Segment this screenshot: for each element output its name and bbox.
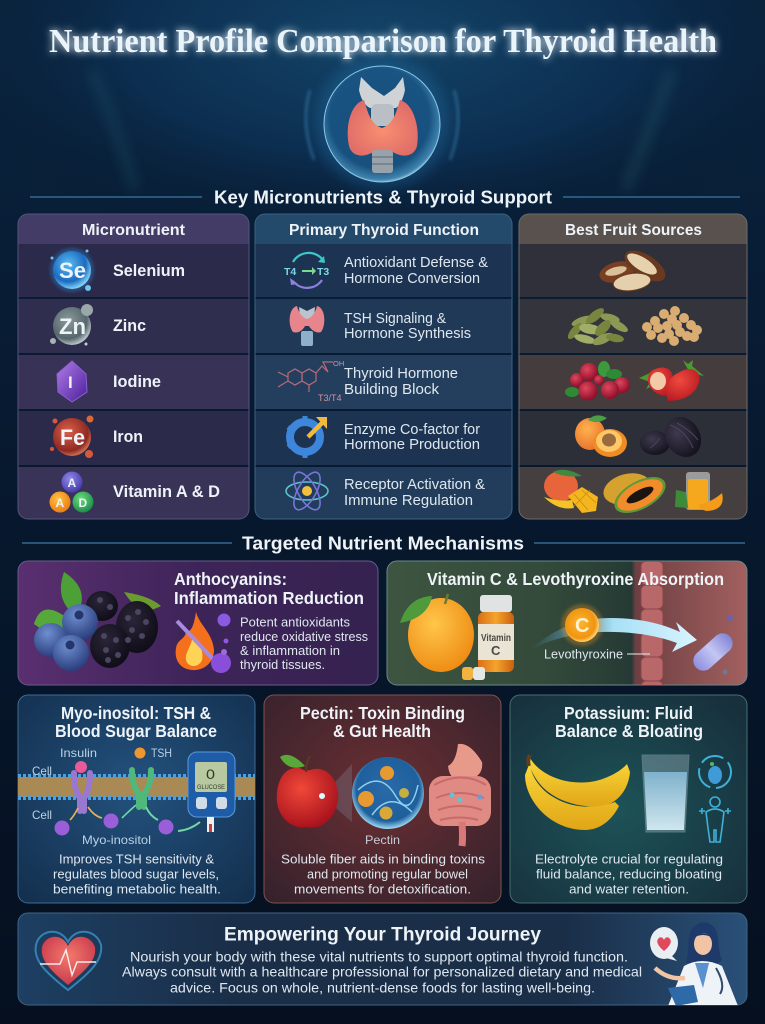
row: antioxidant defense: T3 [317, 266, 329, 278]
row: vitamin A and D [50, 472, 220, 512]
row: antioxidant defense: Antioxidant Defense & [344, 255, 488, 271]
text: anthocyanins description: thyroid tissues. [240, 658, 325, 672]
illustration: cell membrane [18, 776, 255, 798]
food: orange juice [675, 472, 723, 511]
label: levothyroxine: Levothyroxine [544, 648, 623, 662]
illustration: myo-inositol molecules and arrows: Myo-inositol [82, 833, 151, 847]
illustration: vitamin C bottle: C [491, 643, 501, 658]
heading [300, 703, 465, 741]
row: iodine: I [68, 373, 73, 392]
row: selenium [50, 248, 185, 292]
label: pectin: Pectin [365, 833, 400, 847]
panel: best fruit sources column [519, 214, 747, 521]
row: receptor atom: Immune Regulation [344, 493, 473, 509]
row: zinc: Zn [59, 314, 86, 339]
text: pectin description [281, 852, 486, 896]
panel: potassium [510, 695, 747, 903]
heading: Empowering Your Thyroid Journey [224, 924, 541, 946]
row: enzyme gear [288, 416, 480, 458]
heading: targeted nutrient mechanisms: Targeted Nutrient Mechanisms [242, 534, 524, 554]
labels: cell: Cell [32, 764, 52, 778]
icon: vitamin C coin [561, 604, 603, 646]
text: myo-inositol description [53, 852, 221, 896]
heading: & Gut Health [333, 721, 431, 741]
row: antioxidant defense: Hormone Conversion [344, 271, 480, 287]
heading: anthocyanins [174, 569, 364, 608]
text: anthocyanins description [240, 616, 368, 672]
illustration: glucose meter [188, 752, 235, 832]
food: pumpkin seeds [566, 305, 630, 348]
row: hormone molecule [278, 359, 458, 403]
food: prunes [640, 410, 708, 464]
text: myo-inositol description: Improves TSH sensitivity & [59, 852, 214, 866]
food: apricots [575, 415, 627, 457]
text: anthocyanins description: & inflammation in [240, 644, 340, 658]
row: hormone molecule: Building Block [344, 382, 440, 398]
panel: vitamin C and levothyroxine [386, 560, 748, 686]
illustration: TSH receptor [132, 746, 172, 807]
illustration: orange [400, 594, 474, 672]
illustration: TSH receptor: TSH [151, 746, 172, 760]
panel: micronutrient column [18, 214, 249, 519]
row: antioxidant defense: T4 [284, 266, 296, 278]
food: cranberries [565, 361, 630, 400]
row: receptor atom: Receptor Activation & [344, 477, 485, 493]
arrow: absorption swoosh [530, 618, 697, 652]
heading: Blood Sugar Balance [55, 721, 217, 741]
heading: Potassium: Fluid [564, 703, 693, 723]
illustration: bananas [525, 755, 630, 830]
row: hormone molecule: OH [333, 359, 344, 368]
panel: myo-inositol [18, 695, 255, 903]
row: selenium: Selenium [113, 262, 185, 280]
row: enzyme gear: Hormone Production [344, 437, 480, 453]
text: myo-inositol description: regulates blood sugar levels, [53, 866, 219, 882]
icon: flame and wand [176, 612, 231, 673]
column header: Primary Thyroid Function [289, 222, 479, 239]
text: pectin description: movements for detoxification. [294, 882, 471, 896]
illustration: apple [277, 755, 352, 828]
text: anthocyanins description: Potent antioxidants [240, 616, 350, 630]
illustration: intestinal wall cells [641, 561, 663, 705]
illustration: digestive tract [429, 744, 491, 846]
column header: Micronutrient [82, 222, 186, 239]
illustration: myo-inositol molecules and arrows [54, 805, 200, 847]
row: zinc: Zinc [113, 317, 146, 335]
heading [555, 703, 703, 741]
row: antioxidant defense [284, 253, 488, 288]
icon: heart with pulse [36, 932, 101, 990]
heading: Myo-inositol: TSH & [61, 703, 211, 723]
icon: person [699, 797, 731, 842]
illustration: glucose meter: GLUCOSE [197, 785, 225, 791]
row: TSH signaling [290, 306, 471, 346]
row: iodine [57, 361, 161, 402]
row: enzyme gear: Enzyme Co-factor for [344, 422, 480, 438]
text: pectin description: and promoting regular bowel [307, 866, 468, 882]
text: myo-inositol description: benefiting metabolic health. [53, 882, 221, 896]
row: iron [50, 416, 143, 458]
heading: Balance & Bloating [555, 721, 703, 741]
row: hormone molecule: T3/T4 [318, 393, 342, 403]
text: anthocyanins description: reduce oxidative stress [240, 630, 368, 644]
illustration: insulin receptor [60, 746, 97, 811]
illustration: water glass [642, 755, 689, 832]
row: iron: Iron [113, 428, 143, 446]
heading: key micronutrients: Key Micronutrients & Thyroid Support [214, 188, 552, 208]
heading: Vitamin C & Levothyroxine Absorption [427, 569, 724, 589]
text: potassium description [535, 852, 723, 896]
row: TSH signaling: Hormone Synthesis [344, 326, 471, 342]
illustration: doctor [655, 922, 738, 1006]
text: closing message: Nourish your body with these vital nutrients to support optimal thyroid function. [130, 948, 628, 964]
food: mango [544, 470, 598, 513]
row: hormone molecule: Thyroid Hormone [344, 366, 458, 382]
row: iodine: Iodine [113, 373, 161, 391]
icon: water cycle [699, 756, 731, 788]
food: papaya [600, 468, 671, 521]
heading [55, 703, 217, 741]
text: potassium description: and water retention. [569, 882, 689, 896]
food: brazil nuts [597, 244, 670, 293]
heading: anthocyanins: Anthocyanins: [174, 569, 287, 589]
food: chickpeas [642, 306, 702, 346]
text: potassium description: Electrolyte crucial for regulating [535, 852, 723, 866]
food: strawberries [639, 360, 704, 401]
text: closing message [122, 948, 642, 996]
labels: cell: Cell [32, 808, 52, 822]
row: receptor atom [286, 468, 485, 514]
row: vitamin A and D: A [68, 476, 76, 490]
row: selenium: Se [59, 258, 86, 283]
row: vitamin A and D: Vitamin A & D [113, 483, 220, 501]
heading: Pectin: Toxin Binding [300, 703, 465, 723]
panel: empowering your thyroid journey [18, 913, 747, 1006]
illustration: berries [34, 572, 161, 671]
panel: primary thyroid function column [255, 214, 512, 519]
row: vitamin A and D: A [56, 496, 64, 510]
icon: levothyroxine pill [689, 615, 737, 675]
text: closing message: advice. Focus on whole, nutrient-dense foods for lasting well-being. [170, 980, 595, 996]
heading: anthocyanins: Inflammation Reduction [174, 588, 364, 608]
icon: thyroid in glass sphere [306, 57, 458, 189]
illustration: vitamin C bottle: Vitamin [481, 632, 511, 644]
labels: cell [32, 764, 52, 822]
icon: speech bubble with heart [650, 927, 678, 961]
illustration: insulin receptor: Insulin [60, 746, 97, 760]
row: TSH signaling: TSH Signaling & [344, 311, 446, 327]
panel: pectin [264, 695, 501, 903]
text: pectin description: Soluble fiber aids in binding toxins [281, 852, 486, 866]
row: iron: Fe [60, 425, 85, 450]
row: vitamin A and D: D [78, 496, 88, 510]
panel: anthocyanins [18, 561, 378, 685]
column header: Best Fruit Sources [565, 222, 702, 239]
row: zinc [50, 304, 146, 346]
text: closing message: Always consult with a healthcare professional for personalized dietary and medical [122, 964, 642, 980]
icon: vitamin C coin: C [575, 615, 589, 637]
illustration: pectin sphere [352, 757, 424, 829]
illustration: vitamin C bottle [462, 595, 514, 680]
title: Nutrient Profile Comparison for Thyroid Health [49, 23, 717, 60]
illustration: glucose meter: 0 [206, 766, 215, 782]
text: potassium description: fluid balance, reducing bloating [536, 866, 722, 882]
